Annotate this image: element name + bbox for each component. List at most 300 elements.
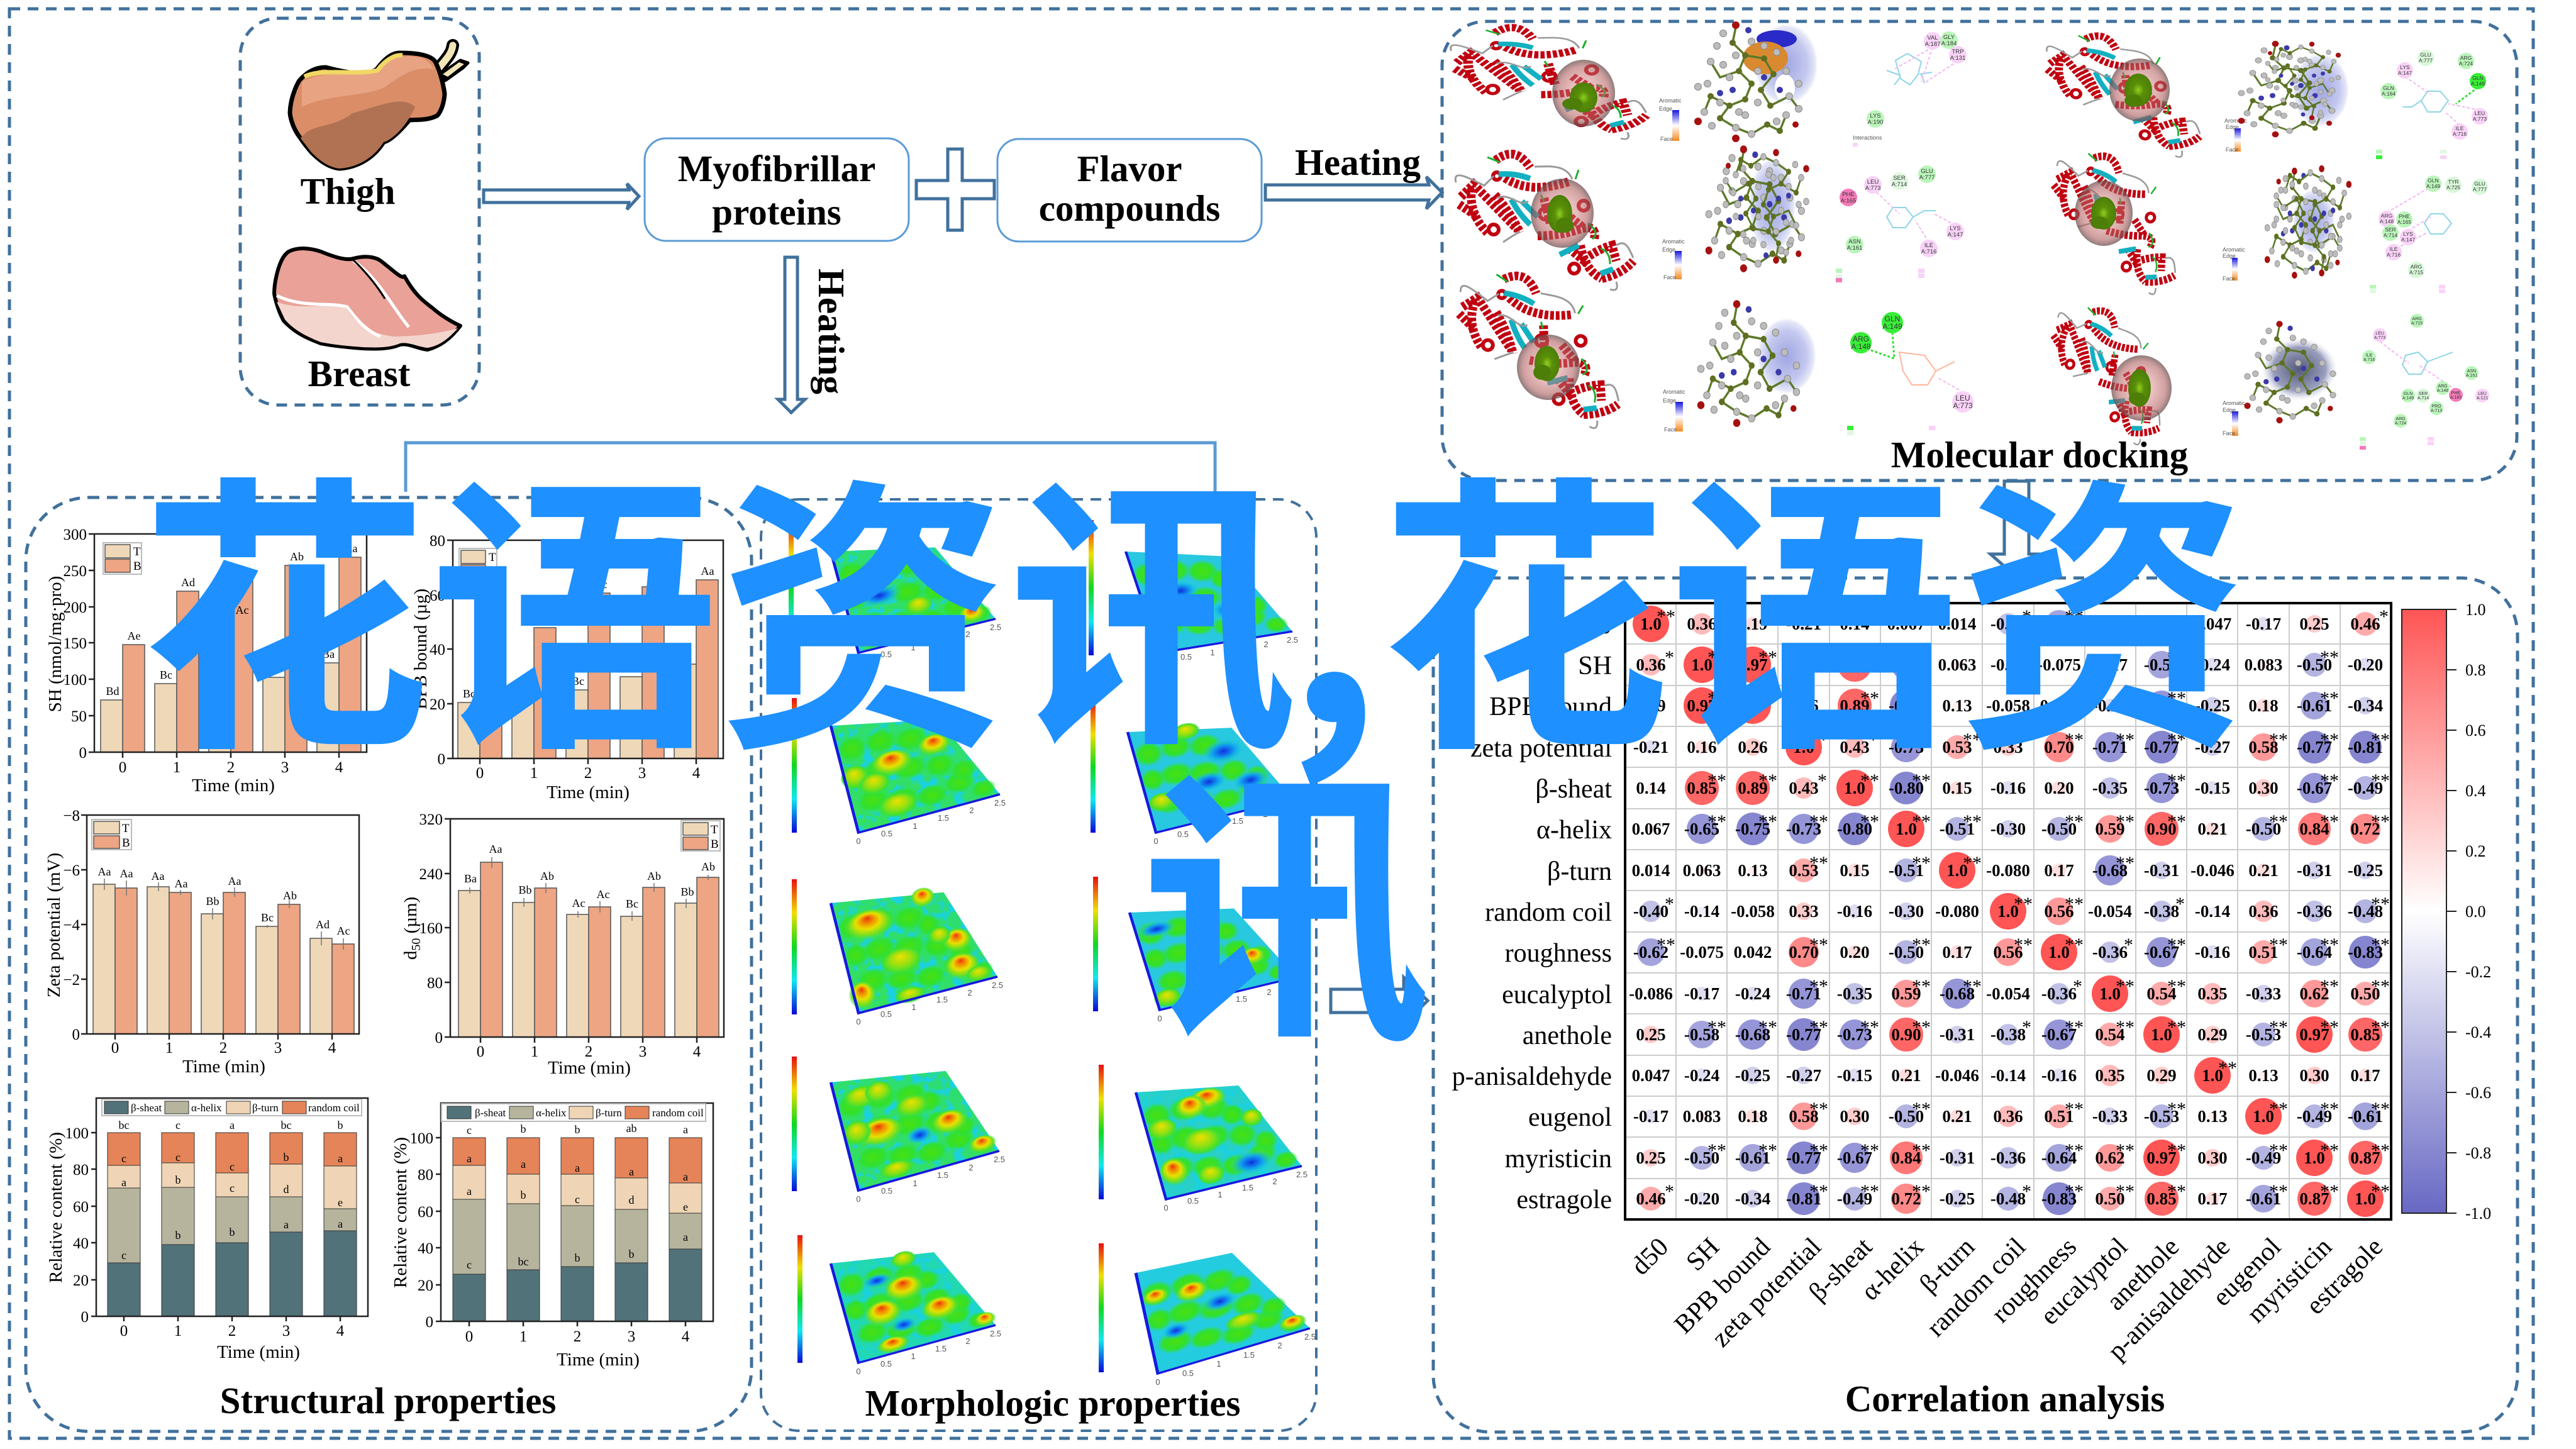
chart: BPB bound bar chart: Ae bbox=[484, 634, 497, 647]
row: d50: 0.46 bbox=[2350, 614, 2380, 633]
2D interaction diagrams left: A:184 bbox=[1941, 40, 1957, 47]
chart: zeta potential bar chart: −2 bbox=[63, 972, 80, 989]
row: eucalyptol: -0.086 bbox=[1629, 984, 1673, 1003]
row: eucalyptol: -0.17 bbox=[1684, 984, 1719, 1003]
row: alpha-helix bbox=[1632, 811, 2390, 847]
chart: stacked secondary structure B: c bbox=[467, 1258, 472, 1271]
surface plot row 1 left: 2 bbox=[965, 630, 970, 639]
docking column: left ligand surfaces bbox=[1694, 21, 1819, 427]
chart: d50 bar chart: 0 bbox=[477, 1043, 484, 1060]
row: myristicin: 0.84 bbox=[1891, 1148, 1921, 1167]
row: p-anisaldehyde: 1.0 bbox=[2202, 1066, 2223, 1085]
row: myristicin: 0.30 bbox=[2197, 1148, 2228, 1167]
color scale: -1.0 bbox=[2465, 1204, 2491, 1223]
chart: stacked secondary structure T: b bbox=[337, 1119, 343, 1131]
row: eugenol: 0.21 bbox=[1942, 1107, 1972, 1126]
surface plot row 5 left: 1 bbox=[911, 1352, 916, 1361]
row: beta-turn: -0.31 bbox=[2297, 861, 2332, 880]
2D interaction diagrams left: A:777 bbox=[1919, 174, 1935, 181]
row: p-anisaldehyde: -0.15 bbox=[1837, 1066, 1872, 1085]
2D interaction diagrams right: A:716 bbox=[2453, 131, 2467, 137]
row: roughness: -0.67 bbox=[2144, 943, 2179, 962]
row: beta-turn bbox=[1632, 852, 2383, 889]
surface plot row 3 left: 2 bbox=[967, 988, 972, 997]
row: random coil: -0.14 bbox=[2195, 902, 2230, 921]
row: eugenol: 0.58 bbox=[1789, 1107, 1819, 1126]
chart: zeta potential bar chart: Aa bbox=[228, 875, 242, 887]
chart: stacked secondary structure B: a bbox=[467, 1185, 472, 1197]
2D interaction diagrams right: LEU bbox=[2375, 331, 2384, 336]
row: eucalyptol bbox=[1629, 975, 2390, 1012]
label: Thigh: Thigh bbox=[301, 170, 395, 212]
row: BPB bound: 0.26 bbox=[1789, 696, 1819, 715]
2D interaction diagrams right: PHE bbox=[2399, 213, 2410, 219]
chart: stacked secondary structure B: a bbox=[629, 1165, 634, 1178]
row: roughness: -0.075 bbox=[1680, 943, 1724, 962]
chart: stacked secondary structure T: a bbox=[338, 1218, 343, 1230]
row: beta-sheet: -0.67 bbox=[2297, 779, 2332, 797]
chart: stacked secondary structure B bbox=[391, 1103, 713, 1370]
surface plot row 1 right: 2 bbox=[1263, 640, 1269, 649]
2D interaction diagrams right: A:121 bbox=[2477, 396, 2488, 401]
row: eugenol: -0.61 bbox=[2348, 1107, 2383, 1126]
chart: SH bar chart: 0 bbox=[79, 745, 87, 762]
docking column: right proteins: Aromatic bbox=[2224, 118, 2247, 124]
chart: stacked secondary structure T: Time (min) bbox=[217, 1342, 300, 1362]
2D interaction diagrams left: SER bbox=[1893, 175, 1906, 182]
row labels: BPB bound bbox=[1489, 692, 1612, 721]
docking column: left proteins: Edge bbox=[1663, 397, 1676, 404]
surface plot row 5 left: 1.5 bbox=[935, 1344, 947, 1353]
row labels: β-turn bbox=[1547, 857, 1612, 886]
row: d50: 0.14 bbox=[1840, 614, 1870, 633]
row: anethole: 0.85 bbox=[2350, 1025, 2380, 1044]
chart: stacked secondary structure T: 20 bbox=[73, 1272, 89, 1289]
chart: BPB bound bar chart: 2 bbox=[584, 765, 592, 782]
row: roughness: -0.50 bbox=[1889, 943, 1924, 962]
color scale: 0.4 bbox=[2465, 782, 2485, 800]
row: alpha-helix: ************************ bbox=[1707, 811, 2390, 832]
surface plot row 2 right: 1.5 bbox=[1232, 816, 1243, 826]
chart: stacked secondary structure T: 80 bbox=[73, 1162, 89, 1179]
row: beta-sheet: 0.89 bbox=[1738, 779, 1768, 797]
heading: correlation analysis: Correlation analysis bbox=[1845, 1378, 2165, 1419]
row: p-anisaldehyde: 0.17 bbox=[2350, 1066, 2380, 1085]
2D interaction diagrams right: A:724 bbox=[2459, 60, 2473, 67]
row: alpha-helix: -0.30 bbox=[1990, 819, 2026, 838]
row: beta-turn: 0.53 bbox=[1789, 861, 1819, 880]
chart: stacked secondary structure T: 60 bbox=[73, 1199, 89, 1216]
surface plot row 5 left: 0.5 bbox=[880, 1359, 892, 1368]
column labels: eucalyptol bbox=[2035, 1233, 2133, 1331]
chart: BPB bound bar chart: Ac bbox=[594, 578, 608, 591]
row: estragole: ******************** bbox=[1665, 1181, 2390, 1202]
row: d50: 0.014 bbox=[1938, 614, 1976, 633]
surface plot row 2 right: 2.5 bbox=[1287, 802, 1298, 812]
chart: stacked secondary structure B: d bbox=[629, 1194, 634, 1206]
chart: zeta potential bar chart: Aa bbox=[175, 877, 187, 890]
docking column: right proteins bbox=[2024, 29, 2247, 450]
2D interaction diagrams right: ILE bbox=[2456, 125, 2463, 131]
chart: d50 bar chart: 240 bbox=[419, 866, 443, 883]
chart: d50 bar chart: Time (min) bbox=[548, 1058, 631, 1078]
2D interaction diagrams right: GLN bbox=[2428, 177, 2439, 184]
chart: stacked secondary structure B: 0 bbox=[425, 1314, 433, 1331]
2D interaction diagrams right: A:773 bbox=[2374, 336, 2385, 340]
row: anethole: -0.73 bbox=[1837, 1025, 1872, 1044]
surface plot row 2 left bbox=[792, 687, 1006, 846]
panel: molecular docking bbox=[1438, 21, 2517, 480]
row: BPB bound: 0.042 bbox=[2040, 696, 2078, 715]
chart: SH bar chart: B bbox=[133, 560, 142, 573]
chart: SH bar chart: Ab bbox=[290, 550, 304, 563]
row: random coil bbox=[1633, 893, 2390, 930]
chart: stacked secondary structure B: 2 bbox=[574, 1328, 581, 1345]
row labels: SH bbox=[1578, 652, 1612, 680]
chart: BPB bound bar chart: 0 bbox=[438, 751, 445, 768]
row: zeta potential: -0.77 bbox=[2297, 738, 2332, 757]
chart: stacked secondary structure B: a bbox=[683, 1231, 688, 1243]
row: myristicin: -0.67 bbox=[1837, 1148, 1872, 1167]
chart: d50 bar chart: B bbox=[711, 838, 719, 851]
chart: BPB bound bar chart: Bc bbox=[463, 687, 475, 700]
chart: SH bar chart: 1 bbox=[173, 759, 180, 776]
chart: stacked secondary structure T: Relative content (%) bbox=[46, 1132, 66, 1283]
row: eucalyptol: -0.71 bbox=[1786, 984, 1821, 1003]
row: estragole: 0.85 bbox=[2146, 1189, 2177, 1208]
chart: stacked secondary structure T: 3 bbox=[282, 1323, 290, 1340]
2D interaction diagrams right: LYS bbox=[2403, 231, 2413, 237]
2D interaction diagrams right: ARG bbox=[2381, 213, 2392, 219]
chart: stacked secondary structure T: 0 bbox=[80, 1309, 89, 1326]
2D interaction diagrams right: ASN bbox=[2467, 369, 2476, 374]
row: BPB bound: 1.0 bbox=[1742, 696, 1763, 715]
row: p-anisaldehyde: -0.25 bbox=[1735, 1066, 1770, 1085]
row: anethole: 1.0 bbox=[2151, 1025, 2172, 1044]
row labels: eugenol bbox=[1528, 1103, 1612, 1132]
chart: zeta potential bar chart: 0 bbox=[111, 1040, 119, 1057]
row labels: β-sheat bbox=[1535, 775, 1612, 804]
chart: stacked secondary structure T: bc bbox=[280, 1119, 292, 1131]
row: eugenol: -0.53 bbox=[2144, 1107, 2179, 1126]
row: myristicin: ********************** bbox=[1707, 1140, 2390, 1161]
column labels: eugenol bbox=[2207, 1233, 2287, 1312]
surface plot row 2 right: 0 bbox=[1153, 836, 1158, 846]
chart: stacked secondary structure B: 60 bbox=[418, 1204, 433, 1221]
2D interaction diagrams right: A:149 bbox=[2426, 183, 2440, 189]
surface plot row 1 right: 2.5 bbox=[1287, 635, 1298, 645]
row: zeta potential bbox=[1633, 729, 2390, 765]
row: eugenol: 0.13 bbox=[2197, 1107, 2228, 1126]
row: anethole: 0.90 bbox=[1891, 1025, 1921, 1044]
chart: stacked secondary structure T: c bbox=[230, 1160, 235, 1173]
surface plot row 2 left: 0 bbox=[856, 836, 861, 846]
2D interaction diagrams right: ARG bbox=[2460, 55, 2472, 61]
surface plot row 1 left: 1.5 bbox=[935, 636, 947, 646]
2D interaction diagrams right: GLU bbox=[2474, 180, 2485, 187]
color scale: 0.0 bbox=[2465, 902, 2485, 921]
heading: morphologic properties: Morphologic properties bbox=[865, 1382, 1241, 1424]
chart: d50 bar chart: 4 bbox=[693, 1043, 701, 1060]
2D interaction diagrams right: A:147 bbox=[2398, 70, 2412, 76]
2D interaction diagrams right: A:777 bbox=[2473, 186, 2487, 192]
row: SH: -0.17 bbox=[2092, 655, 2128, 674]
chart: BPB bound bar chart: 40 bbox=[430, 641, 445, 658]
chart: zeta potential bar chart: 2 bbox=[219, 1040, 227, 1057]
row: random coil: -0.36 bbox=[2297, 902, 2332, 921]
arrow: compounds to docking bbox=[1265, 177, 1442, 209]
row: estragole: 1.0 bbox=[2355, 1189, 2376, 1208]
2D interaction diagrams right: LYS bbox=[2400, 64, 2410, 70]
row: d50: -0.40 bbox=[1990, 614, 2026, 633]
box: myofibrillar proteins: proteins bbox=[712, 191, 841, 233]
2D interaction diagrams left bbox=[1836, 31, 1974, 435]
surface plot row 1 right: 0.5 bbox=[1180, 652, 1192, 662]
row: beta-sheet: -0.80 bbox=[1889, 779, 1924, 797]
row: alpha-helix: 0.84 bbox=[2299, 819, 2329, 838]
row: d50: -0.21 bbox=[1786, 614, 1821, 633]
chart: stacked secondary structure B: c bbox=[467, 1124, 472, 1136]
column labels: anethole bbox=[2101, 1233, 2185, 1316]
row: estragole bbox=[1636, 1180, 2390, 1217]
row: zeta potential: 0.43 bbox=[1840, 738, 1870, 757]
chart: zeta potential bar chart: −4 bbox=[63, 917, 80, 934]
row: d50: ****** bbox=[1657, 606, 2389, 627]
row: BPB bound: -0.75 bbox=[1889, 696, 1924, 715]
chart: stacked secondary structure T: β-turn bbox=[252, 1102, 279, 1114]
row: roughness: -0.64 bbox=[2297, 943, 2332, 962]
row: random coil: -0.16 bbox=[1837, 902, 1872, 921]
chart: stacked secondary structure T: c bbox=[230, 1182, 235, 1194]
chart: stacked secondary structure T: d bbox=[283, 1183, 289, 1196]
surface plot row 4 right: 1.5 bbox=[1242, 1183, 1253, 1192]
chart: BPB bound bar chart: BPB bound (µg) bbox=[411, 589, 431, 709]
row: random coil: -0.14 bbox=[1684, 902, 1719, 921]
docking column: left proteins: Face bbox=[1660, 136, 1673, 142]
chart: BPB bound bar chart: 3 bbox=[638, 765, 646, 782]
row: estragole: 0.72 bbox=[1891, 1189, 1921, 1208]
chart: stacked secondary structure B: random coil bbox=[652, 1107, 704, 1119]
2D interaction diagrams left: A:190 bbox=[1868, 119, 1883, 126]
row: p-anisaldehyde: 0.35 bbox=[2095, 1066, 2125, 1085]
2D interaction diagrams right: A:149 bbox=[2402, 396, 2414, 401]
2D interaction diagrams right: A:716 bbox=[2363, 358, 2375, 362]
chart: zeta potential bar chart: T bbox=[122, 822, 130, 835]
surface plot row 3 right: 0.5 bbox=[1181, 1008, 1192, 1017]
row labels: estragole bbox=[1516, 1185, 1612, 1214]
2D interaction diagrams right: PHE bbox=[2451, 391, 2460, 396]
chart: BPB bound bar chart: Ba bbox=[679, 649, 692, 662]
row: zeta potential: ******************* bbox=[1809, 730, 2390, 750]
surface plot row 3 right: 2 bbox=[1267, 987, 1272, 997]
row: eugenol: -0.49 bbox=[2297, 1107, 2332, 1126]
row: beta-turn: -0.31 bbox=[2144, 861, 2179, 880]
chart: zeta potential bar chart: Zeta potential (mV) bbox=[44, 853, 64, 997]
2D interaction diagrams right: ARG bbox=[2438, 384, 2448, 389]
row: eucalyptol: *************** bbox=[1809, 976, 2390, 997]
row: eugenol: 0.18 bbox=[1738, 1107, 1768, 1126]
chart: stacked secondary structure T bbox=[46, 1098, 368, 1362]
row: BPB bound: -0.61 bbox=[2297, 696, 2332, 715]
row: eucalyptol: 1.0 bbox=[2099, 984, 2121, 1003]
surface plot row 5 left: 2.5 bbox=[990, 1329, 1001, 1338]
2D interaction diagrams right: ARG bbox=[2411, 264, 2422, 270]
surface plot row 4 left: 0.5 bbox=[881, 1186, 892, 1196]
surface plot row 2 left: 1.5 bbox=[938, 813, 949, 823]
chart: stacked secondary structure B: a bbox=[683, 1170, 688, 1183]
row: eugenol: 0.36 bbox=[1993, 1107, 2023, 1126]
2D interaction diagrams left: A:716 bbox=[1921, 248, 1936, 255]
chart: SH bar chart: Bc bbox=[160, 669, 172, 681]
2D interaction diagrams left: GLY bbox=[1943, 34, 1955, 41]
chart: d50 bar chart: T bbox=[711, 823, 718, 836]
2D interaction diagrams right: LEU bbox=[2478, 392, 2487, 396]
docking column: left proteins: Face bbox=[1664, 426, 1677, 433]
row: beta-turn: -0.080 bbox=[1986, 861, 2030, 880]
chart: SH bar chart: Ba bbox=[322, 648, 335, 660]
surface plot row 5 right: 0 bbox=[1155, 1377, 1160, 1387]
chart: stacked secondary structure T: 1 bbox=[174, 1323, 182, 1340]
row: d50: 0.25 bbox=[2146, 614, 2177, 633]
2D interaction diagrams left: A:773 bbox=[1865, 185, 1880, 192]
2D interaction diagrams left: LYS bbox=[1950, 225, 1961, 232]
row: SH: ************* bbox=[1665, 647, 2339, 668]
arrow: morphology to correlation bbox=[1331, 977, 1428, 1024]
row: myristicin: -0.64 bbox=[2041, 1148, 2077, 1167]
chart: SH bar chart: Ae bbox=[127, 630, 141, 642]
chart: stacked secondary structure T: 100 bbox=[65, 1125, 89, 1142]
row: myristicin bbox=[1636, 1140, 2390, 1176]
row labels: myristicin bbox=[1505, 1145, 1612, 1174]
row: zeta potential: 0.58 bbox=[2248, 738, 2279, 757]
chart: SH bar chart: Bb bbox=[267, 662, 281, 675]
row: estragole: 0.17 bbox=[2197, 1189, 2228, 1208]
row: roughness: 0.56 bbox=[1993, 943, 2023, 962]
row: p-anisaldehyde: -0.27 bbox=[1786, 1066, 1821, 1085]
row: BPB bound: -0.68 bbox=[2144, 696, 2179, 715]
row: anethole: -0.67 bbox=[2041, 1025, 2077, 1044]
chart: zeta potential bar chart: −6 bbox=[63, 862, 80, 879]
row: BPB bound: 0.89 bbox=[1840, 696, 1870, 715]
row: d50: 1.0 bbox=[1640, 614, 1662, 633]
row: alpha-helix: -0.51 bbox=[1940, 819, 1975, 838]
chart: BPB bound bar chart: 60 bbox=[430, 587, 445, 604]
chart: zeta potential bar chart bbox=[44, 808, 359, 1077]
surface plot row 2 left: 2 bbox=[969, 806, 974, 815]
row: SH: 0.97 bbox=[1738, 655, 1768, 674]
chart: zeta potential bar chart: Ad bbox=[316, 918, 330, 931]
chart: d50 bar chart: 0 bbox=[435, 1030, 443, 1046]
row: d50: -0.62 bbox=[2041, 614, 2077, 633]
surface plot row 4 right bbox=[1099, 1059, 1307, 1213]
row: alpha-helix: 0.72 bbox=[2350, 819, 2380, 838]
surface plot row 4 right: 0 bbox=[1163, 1203, 1169, 1213]
2D interaction diagrams right: A:724 bbox=[2395, 421, 2406, 426]
surface plot row 5 left: 0 bbox=[856, 1367, 861, 1376]
row: estragole: 0.50 bbox=[2095, 1189, 2125, 1208]
row: beta-sheet: -0.35 bbox=[2092, 779, 2128, 797]
chart: d50 bar chart: 50 bbox=[409, 938, 423, 951]
row labels: anethole bbox=[1523, 1021, 1612, 1050]
chart: BPB bound bar chart: 80 bbox=[430, 533, 445, 550]
row: myristicin: 0.25 bbox=[1636, 1148, 1666, 1167]
row: eugenol: -0.17 bbox=[1633, 1107, 1668, 1126]
row: beta-sheet: -0.15 bbox=[2195, 779, 2230, 797]
surface plot row 1 left: 0.5 bbox=[880, 650, 892, 659]
chart: SH bar chart: Bb bbox=[213, 664, 227, 677]
2D interaction diagrams right: SER bbox=[2419, 392, 2428, 396]
2D interaction diagrams right: GLN bbox=[2472, 75, 2484, 81]
row: SH: 0.36 bbox=[1636, 655, 1666, 674]
row: beta-sheet: 0.43 bbox=[1789, 779, 1819, 797]
row: random coil: -0.054 bbox=[2088, 902, 2132, 921]
row: SH: -0.50 bbox=[2297, 655, 2332, 674]
surface plot row 4 left: 1 bbox=[913, 1179, 918, 1188]
column labels: β-turn bbox=[1914, 1233, 1980, 1299]
chart: stacked secondary structure B: c bbox=[575, 1193, 580, 1206]
chart: d50 bar chart: Ac bbox=[596, 888, 610, 901]
2D interaction diagrams right: GLN bbox=[2404, 392, 2412, 396]
row: eugenol: 0.51 bbox=[2044, 1107, 2074, 1126]
row: roughness: 0.17 bbox=[1942, 943, 1972, 962]
row labels: zeta potential bbox=[1470, 734, 1612, 763]
row: beta-turn: 0.15 bbox=[1840, 861, 1870, 880]
chart: BPB bound bar chart: Ab bbox=[647, 572, 661, 584]
chart: stacked secondary structure B: Time (min) bbox=[557, 1350, 640, 1370]
surface plot row 3 left: 2.5 bbox=[992, 980, 1003, 990]
surface plot row 4 left: 2 bbox=[969, 1163, 974, 1172]
row: eugenol: -0.33 bbox=[2092, 1107, 2128, 1126]
label: heating horizontal: Heating bbox=[1295, 142, 1421, 183]
row: zeta potential: -0.71 bbox=[2092, 738, 2128, 757]
column labels: β-sheat bbox=[1804, 1232, 1878, 1307]
row: p-anisaldehyde: 0.21 bbox=[1891, 1066, 1921, 1085]
chart: stacked secondary structure B: a bbox=[683, 1123, 688, 1136]
2D interaction diagrams right: A:165 bbox=[2450, 396, 2462, 400]
color scale: -0.8 bbox=[2465, 1144, 2491, 1162]
chart: stacked secondary structure B: a bbox=[521, 1158, 526, 1170]
chart: stacked secondary structure B: 0 bbox=[465, 1328, 473, 1345]
bracket connector bbox=[406, 443, 1215, 492]
row: BPB bound: 0.19 bbox=[1636, 696, 1666, 715]
row: myristicin: 1.0 bbox=[2304, 1148, 2325, 1167]
row: myristicin: -0.49 bbox=[2246, 1148, 2281, 1167]
row: beta-turn: -0.25 bbox=[2348, 861, 2383, 880]
row: SH bbox=[1636, 647, 2383, 683]
docking column: left proteins: Edge bbox=[1662, 247, 1675, 253]
row: beta-turn: ******** bbox=[1809, 853, 2135, 874]
row: estragole: -0.34 bbox=[1735, 1189, 1770, 1208]
2D interaction diagrams left: A:714 bbox=[1892, 181, 1907, 188]
chart: d50 bar chart: Ab bbox=[540, 870, 554, 882]
row: eucalyptol: -0.054 bbox=[1986, 984, 2030, 1003]
chart: stacked secondary structure T: b bbox=[175, 1229, 181, 1241]
chart: BPB bound bar chart: Time (min) bbox=[547, 782, 630, 802]
chart: SH bar chart: Ac bbox=[235, 604, 249, 616]
chart: zeta potential bar chart: Aa bbox=[119, 867, 133, 880]
surface plot row 3 right bbox=[1093, 877, 1302, 1023]
row: p-anisaldehyde: 0.30 bbox=[2299, 1066, 2329, 1085]
row: roughness: -0.16 bbox=[2195, 943, 2230, 962]
2D interaction diagrams left: LYS bbox=[1870, 113, 1881, 119]
row: alpha-helix: -0.80 bbox=[1837, 819, 1872, 838]
row labels: roughness bbox=[1505, 939, 1612, 968]
row: myristicin: -0.50 bbox=[1684, 1148, 1719, 1167]
chart: stacked secondary structure T: β-sheat bbox=[131, 1102, 162, 1114]
chart: BPB bound bar chart: B bbox=[489, 565, 497, 579]
row: BPB bound: ************ bbox=[1707, 688, 2339, 709]
arrow: thigh to proteins bbox=[484, 184, 639, 209]
